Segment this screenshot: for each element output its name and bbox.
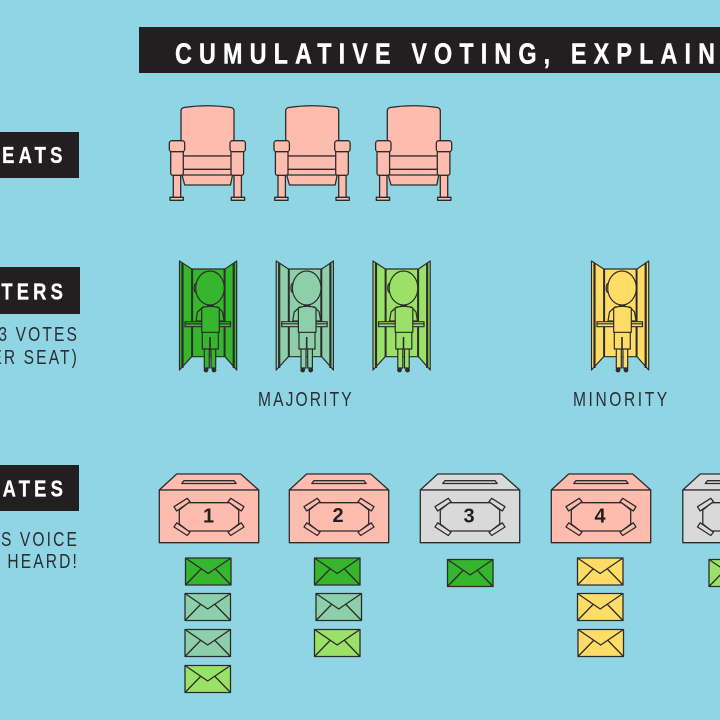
heading: seats [0,132,79,178]
heading: candidates [0,465,79,511]
envelopes: candidate 3 [448,560,493,586]
ballot box 1 [159,474,259,543]
ballot box 3 [420,474,520,543]
title [139,27,720,73]
envelopes: candidate 2 [314,558,362,656]
envelopes: candidate 4 [578,558,624,656]
envelopes: candidate 1 [185,558,231,692]
envelopes: candidate 5 [709,560,720,586]
ballot box 3: 3 [463,506,475,528]
majority voting booths [180,261,430,372]
ballot box 1: 1 [203,506,214,528]
ballot box 2 [289,474,389,543]
majority label: MAJORITY [258,388,354,411]
ballot box 4: 4 [594,506,606,528]
heading: voters [0,267,80,314]
voter note: 3 VOTES [0,323,79,346]
ballot box 2: 2 [332,505,344,527]
ballot box 4 [551,474,651,543]
minority voting booth [592,261,649,372]
seat icons [169,106,452,200]
minority label: MINORITY [573,388,670,411]
ballot box 5 [683,474,720,543]
